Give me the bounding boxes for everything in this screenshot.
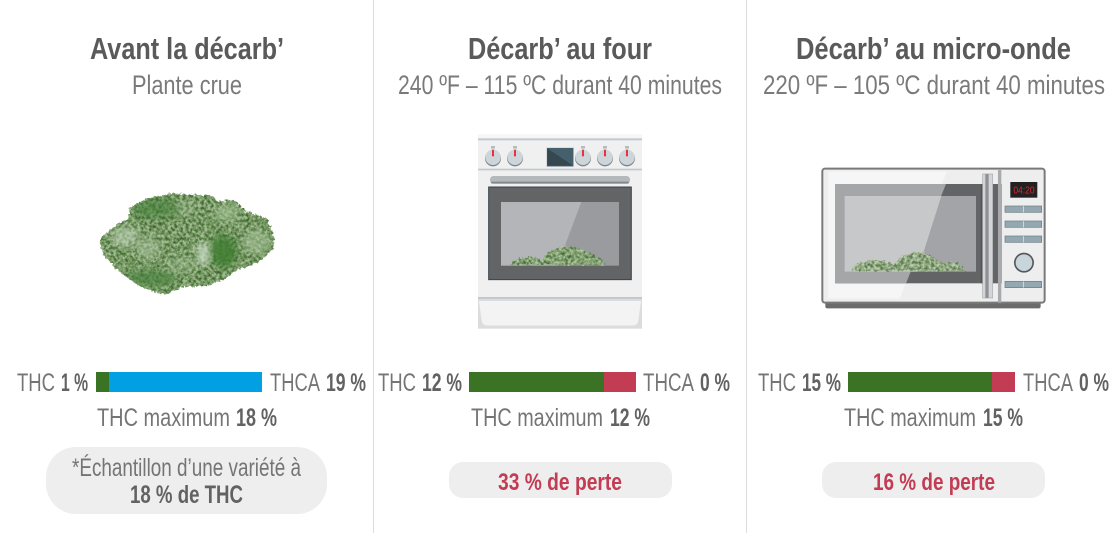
callout: 33 percent loss: 33 % de perte	[498, 469, 622, 496]
callout: 16 percent loss: 16 % de perte	[873, 469, 995, 496]
icon: oven	[478, 134, 642, 329]
text: THC maximum 18: 18 %	[236, 404, 277, 432]
text: THC maximum 18: THC maximum	[97, 404, 230, 432]
subheading: plante crue: Plante crue	[132, 70, 242, 100]
chart: THC bar oven: THCA	[643, 369, 694, 397]
column divider left	[373, 0, 374, 533]
chart: THC bar microwave: THCA	[1023, 369, 1073, 397]
callout: 16 percent loss	[822, 462, 1045, 498]
text: THC maximum 15: 15 %	[983, 404, 1023, 432]
text: THC maximum 12: THC maximum	[471, 404, 603, 432]
icon: digital display: 04:20	[1013, 186, 1035, 197]
icon: raw cannabis bud	[99, 193, 274, 295]
icon: digital display	[1010, 182, 1037, 198]
chart: THC bar microwave: THC	[758, 369, 796, 397]
chart: THC bar oven: 12 %	[422, 369, 462, 397]
heading: avant: Avant la décarb’	[90, 31, 284, 66]
chart: THC bar oven	[378, 369, 730, 397]
chart: THC bar microwave: 15 %	[802, 369, 841, 397]
chart: THC bar before: 1 %	[61, 369, 88, 397]
text: THC maximum 15: THC maximum	[844, 404, 976, 432]
chart: THC bar before	[17, 369, 366, 397]
panel: avant la décarb	[17, 31, 366, 514]
chart: THC bar before: THCA	[270, 369, 320, 397]
icon: microwave	[822, 169, 1045, 308]
heading: four: Décarb’ au four	[468, 31, 652, 66]
callout: sample note: *Échantillon d’une variété à	[72, 453, 301, 482]
text: THC maximum 12: 12 %	[610, 404, 650, 432]
chart: THC bar before: THC	[17, 369, 55, 397]
callout: 33 percent loss	[449, 462, 672, 498]
callout: sample note	[46, 447, 327, 514]
chart: THC bar oven: THC	[378, 369, 416, 397]
chart: THC bar before: 19 %	[326, 369, 366, 397]
callout: sample note: 18 % de THC	[130, 481, 243, 509]
panel: décarb au four	[378, 31, 730, 498]
subheading: four temperature: 240 ºF – 115 ºC durant 40 minutes	[398, 70, 722, 100]
column divider right	[746, 0, 747, 533]
chart: THC bar oven: 0 %	[700, 369, 730, 397]
panel: décarb au micro-onde	[758, 31, 1109, 498]
chart: THC bar microwave	[758, 369, 1109, 397]
